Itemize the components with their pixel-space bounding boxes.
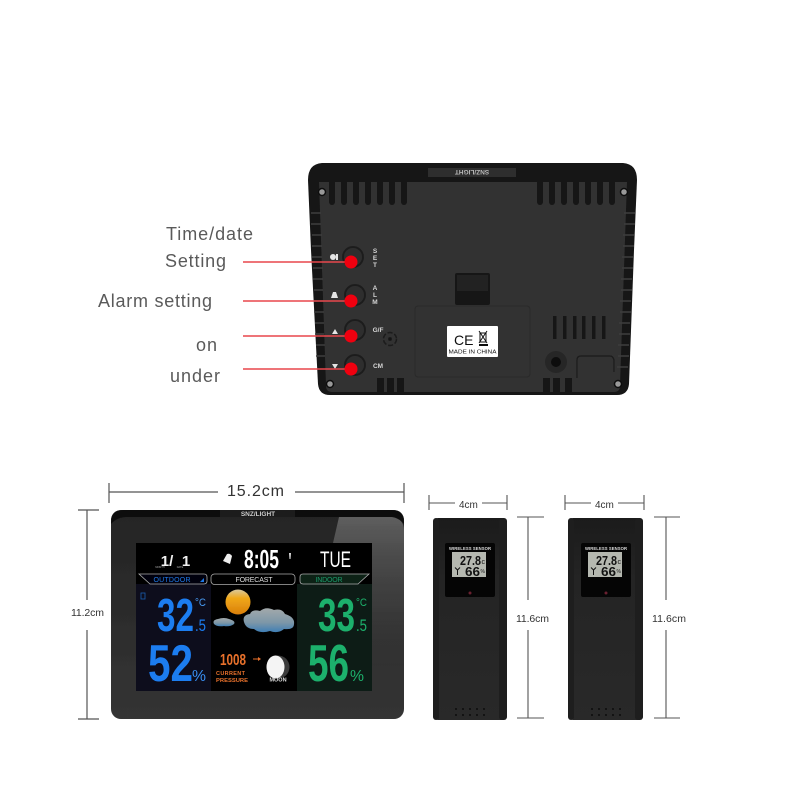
mounting hole xyxy=(545,351,567,373)
outdoor humidity: 52 xyxy=(148,635,193,693)
sensor 2 body xyxy=(568,518,643,720)
buzzer xyxy=(384,332,396,346)
callout: alarm setting xyxy=(98,291,358,311)
outdoor temperature: °C xyxy=(195,597,206,609)
sensor 1 display: c xyxy=(482,559,486,566)
battery door xyxy=(415,306,530,377)
icon: outdoor signal xyxy=(141,593,145,599)
indoor humidity: 56 xyxy=(308,635,349,693)
sensor 1 display: % xyxy=(480,569,486,575)
button labels on housing: A xyxy=(373,285,378,292)
glass reflection xyxy=(333,517,404,670)
sensor 2 vents xyxy=(591,708,621,716)
clock readout: 8:05 xyxy=(244,544,279,574)
callout: time/date setting: Setting xyxy=(165,251,226,271)
back housing xyxy=(308,163,637,395)
sensor 1 display: WIRELESS SENSOR xyxy=(449,546,491,551)
forecast tab: FORECAST xyxy=(236,577,273,584)
indoor humidity: % xyxy=(350,668,364,685)
sensor 2 display: c xyxy=(618,559,622,566)
callout: time/date setting: Time/date xyxy=(166,224,253,244)
sensor 2 display: % xyxy=(616,569,622,575)
sensor 2 display: WIRELESS SENSOR xyxy=(585,546,627,551)
height dimension 11.2cm: 11.2cm xyxy=(71,607,104,619)
sensor 2 display xyxy=(581,543,631,597)
button labels on housing: E xyxy=(373,255,378,262)
outdoor temperature: .5 xyxy=(195,616,206,635)
indoor temperature: 33 xyxy=(318,589,355,641)
icon: alarm bell xyxy=(223,554,232,564)
certification label: MADE IN CHINA xyxy=(448,350,497,356)
model plate: SNZ/LIGHT xyxy=(455,168,489,175)
callout: under xyxy=(170,362,358,386)
side slots xyxy=(553,316,606,339)
sensor 2 height dimension: 11.6cm xyxy=(652,613,686,625)
width dimension 15.2cm xyxy=(109,483,404,503)
sensor 2 width dimension xyxy=(565,495,644,511)
callout: on xyxy=(196,330,358,355)
outdoor tab xyxy=(139,574,207,584)
icon: radio signal xyxy=(289,553,291,559)
outdoor tab: OUTDOOR xyxy=(154,577,190,584)
pressure readout: CURRENT xyxy=(216,671,246,677)
screws xyxy=(318,188,628,388)
pressure readout: 1008 xyxy=(220,652,246,669)
forecast tab xyxy=(211,574,295,584)
icon: sun xyxy=(226,590,250,614)
indoor temperature: °C xyxy=(356,597,367,609)
button labels on housing: M xyxy=(372,299,378,306)
callout: alarm setting: Alarm setting xyxy=(98,291,212,311)
sensor 2 display: 66 xyxy=(601,564,616,579)
button labels on housing: G/F xyxy=(373,327,383,334)
front view of the station xyxy=(111,510,404,719)
date readout: MONTH xyxy=(155,566,165,569)
sensor 1 display xyxy=(445,543,495,597)
icon: small cloud xyxy=(214,618,234,626)
sensor 2 width dimension: 4cm xyxy=(595,500,614,511)
sensor 1 width dimension: 4cm xyxy=(459,500,478,511)
wireless sensor 1 xyxy=(429,495,549,720)
date readout: 1 xyxy=(182,553,190,570)
front housing xyxy=(111,510,404,719)
sensor 1 body xyxy=(433,518,507,720)
height dimension 11.2cm xyxy=(71,510,104,719)
LCD screen xyxy=(136,543,372,691)
date readout: DATE xyxy=(177,566,184,569)
sensor 2 height dimension xyxy=(652,517,686,718)
indoor tab: INDOOR xyxy=(316,577,342,584)
sensor 1 vents xyxy=(455,708,485,716)
button labels on housing xyxy=(372,248,383,370)
icon: large cloud xyxy=(244,608,294,632)
side ribs xyxy=(311,213,635,367)
certification label xyxy=(447,326,498,357)
sensor door outline xyxy=(577,356,614,378)
model tag: SNZ/LIGHT xyxy=(241,511,275,518)
sensor 1 width dimension xyxy=(429,495,507,511)
button labels on housing: L xyxy=(373,292,377,299)
sensor 1 display: 66 xyxy=(465,564,480,579)
date readout xyxy=(155,553,190,570)
sensor 1 height dimension xyxy=(516,517,549,718)
date readout: 1/ xyxy=(161,553,174,570)
icon: moon: MOON xyxy=(269,678,287,684)
model plate xyxy=(428,168,516,177)
stand clip xyxy=(455,273,490,305)
button icons xyxy=(330,254,338,369)
icon: moon xyxy=(266,656,290,684)
wireless sensor 2 xyxy=(565,495,686,720)
bottom vents xyxy=(377,378,572,395)
pressure readout: PRESSURE xyxy=(216,678,248,684)
top vents xyxy=(329,173,615,205)
back view of the station xyxy=(308,163,637,395)
callout: time/date setting xyxy=(165,224,358,271)
button labels on housing: CM xyxy=(373,363,383,370)
buttons xyxy=(343,247,365,375)
certification label: CE xyxy=(454,332,473,348)
weekday readout: TUE xyxy=(320,547,351,572)
button labels on housing: T xyxy=(373,262,377,269)
sensor 1 height dimension: 11.6cm xyxy=(516,613,549,625)
callout: on: on xyxy=(196,335,217,355)
callout: under: under xyxy=(170,366,220,386)
button labels on housing: S xyxy=(373,248,378,255)
sensor 2 display: 27.8 xyxy=(596,553,617,568)
pressure readout xyxy=(216,652,261,684)
indoor tab xyxy=(300,574,369,584)
outdoor temperature: 32 xyxy=(157,589,194,641)
sensor 1 display: 27.8 xyxy=(460,553,481,568)
width dimension 15.2cm: 15.2cm xyxy=(227,483,284,500)
indoor temperature: .5 xyxy=(356,616,367,635)
outdoor humidity: % xyxy=(192,668,206,685)
